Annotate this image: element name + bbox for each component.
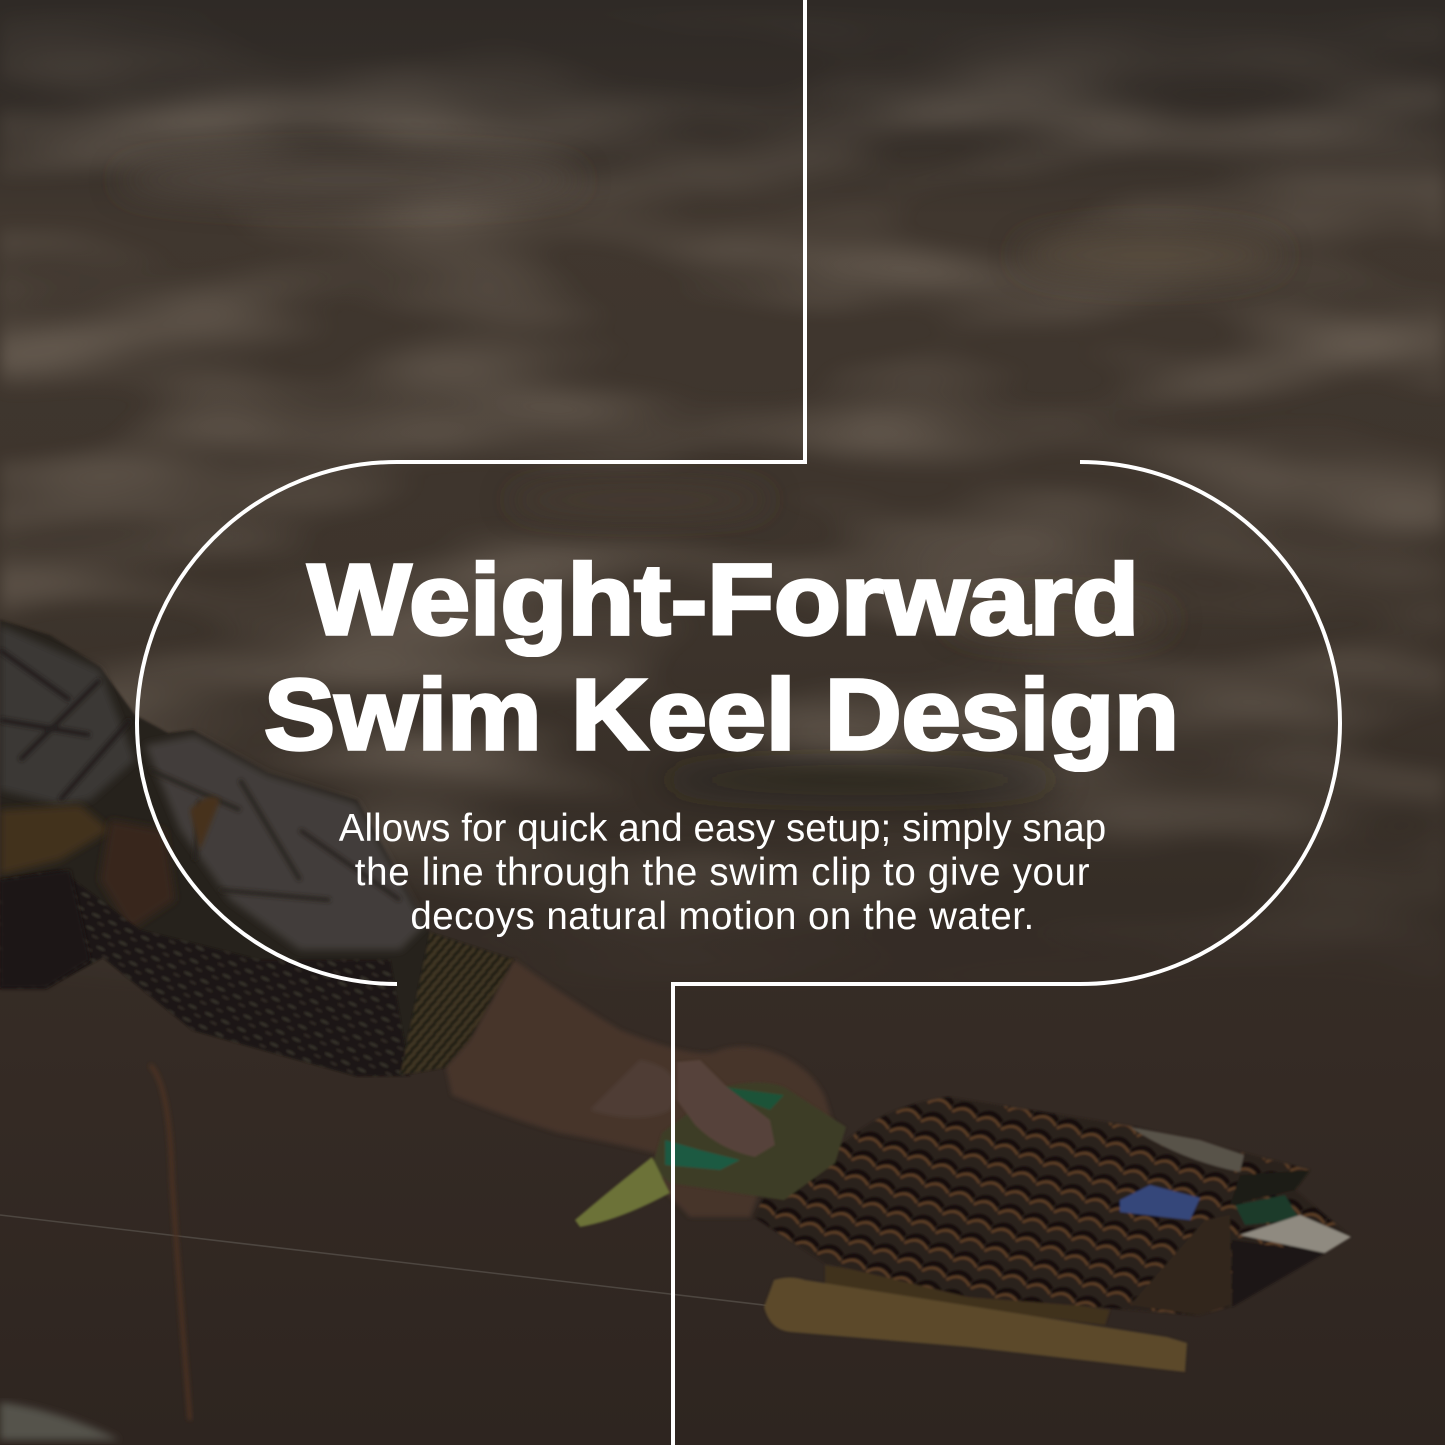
icon: decoy stand bbox=[825, 1265, 1110, 1325]
icon: decoy wing patch bbox=[1120, 1185, 1200, 1220]
sleeve upper fold bbox=[0, 625, 135, 805]
icon: decoy head bbox=[652, 1082, 846, 1200]
riverbank texture bbox=[0, 36, 1445, 932]
fishing line bbox=[0, 1215, 772, 1306]
body text: decoys natural motion on the water. bbox=[410, 895, 1035, 938]
title line one: Weight-Forward bbox=[308, 544, 1139, 656]
icon: decoy keel bbox=[764, 1278, 1187, 1372]
icon: thumb over head bbox=[677, 1060, 775, 1157]
boat edge bbox=[0, 1402, 120, 1440]
right outline path bbox=[673, 462, 1340, 1445]
icon: camo sleeve bbox=[0, 620, 514, 1076]
icon: decoy rear bbox=[1130, 1215, 1232, 1315]
sleeve cuff bbox=[400, 933, 514, 1075]
icon: decoy bill bbox=[575, 1157, 670, 1227]
left outline path bbox=[137, 0, 805, 984]
body text bbox=[338, 807, 1106, 938]
body text: the line through the swim clip to give your bbox=[355, 851, 1090, 894]
blurred riverbank highlights bbox=[120, 160, 1280, 796]
sleeve lower knit bbox=[0, 870, 410, 1076]
reed bbox=[150, 1065, 190, 1420]
icon: decoy body bbox=[754, 1097, 1351, 1315]
icon: duck decoy bbox=[575, 1082, 1351, 1372]
icon: decoy tail bbox=[1230, 1170, 1310, 1205]
body text: Allows for quick and easy setup; simply snap bbox=[339, 807, 1106, 850]
icon: hand bbox=[446, 960, 835, 1217]
sleeve brown patch bbox=[0, 805, 110, 875]
sleeve middle fold bbox=[145, 735, 425, 950]
title line two: Swim Keel Design bbox=[264, 659, 1179, 771]
